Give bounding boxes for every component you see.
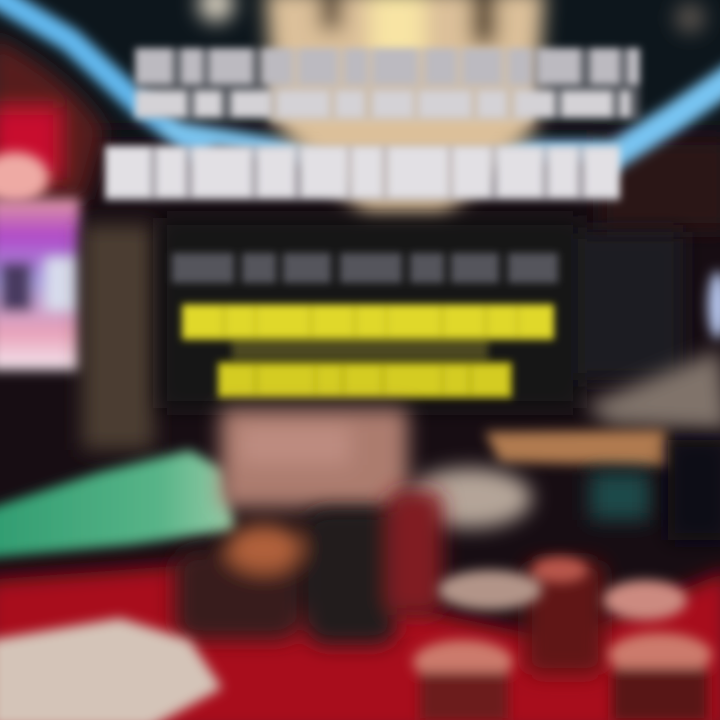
neon ceiling stripe	[0, 0, 720, 158]
left red wall highlight	[0, 152, 49, 204]
chandelier	[198, 0, 705, 215]
headline: blurred white lettering	[105, 48, 640, 201]
cushioned stools	[413, 557, 712, 720]
teal stand	[590, 472, 650, 520]
lounge chairs	[175, 490, 605, 675]
wooden table	[485, 430, 670, 466]
right upholstered back	[585, 350, 720, 430]
papers on floor	[0, 618, 222, 720]
left pillar	[82, 225, 154, 450]
green table	[0, 450, 235, 558]
white round table	[408, 468, 532, 528]
dark right cabinet	[668, 440, 720, 540]
dark curtain wall	[160, 218, 683, 408]
left video screen	[0, 198, 80, 370]
pink back panel	[220, 408, 408, 508]
left red wall	[0, 35, 105, 200]
highlight: blurred yellow lettering	[182, 304, 554, 398]
red carpet floor	[0, 565, 720, 720]
subheading: blurred grey lettering	[172, 253, 558, 283]
right edge glow	[708, 271, 720, 339]
ceiling	[0, 0, 720, 230]
